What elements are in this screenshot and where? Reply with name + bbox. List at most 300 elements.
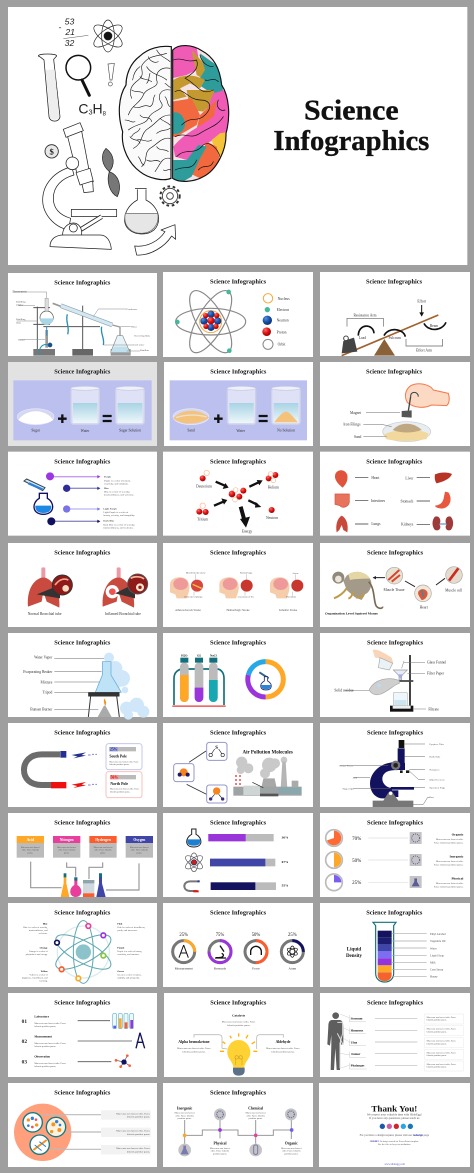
slide title: Science Infographics [54,550,111,557]
heading: Science Infographics [273,95,429,157]
icon: test tube sketch [38,54,60,121]
slide: test tube rack and donut [163,633,313,717]
labels: magnet diagram: Iron Filings [343,422,361,426]
text boxes [101,1110,151,1154]
connectors [194,1035,283,1049]
labels: Sugar [31,428,41,432]
text boxes: Maecenas non laoreet odio. Fusce [427,1041,456,1043]
text boxes: Maecenas non laoreet odio. Fusce [116,1112,151,1115]
labels and arrows: organs: Lungs [371,522,381,526]
labels: Helium [268,486,279,490]
labels: bones [340,1014,417,1069]
slide: catalysts bulb [164,993,313,1077]
slide: nuclear fusion [163,452,313,536]
diagram: filtration: Solid residue [334,689,354,693]
heading: Science Infographics: Infographics [273,126,429,157]
text: licence [370,1140,419,1146]
diagram: atom teal [51,921,115,983]
rows: lab steps: 01 [22,1019,27,1025]
text blocks: Blue is a color of serenity, [104,491,130,494]
slide: atom colours [8,903,157,987]
diagram: organ circles: Muscle Tissue [383,588,405,592]
labels: Objective Lens [429,779,444,782]
operators [58,414,112,423]
diagram: distillation: Thermometer [12,291,27,294]
icon: monkey [332,572,383,608]
chart: timeline [178,1108,297,1156]
text blocks: Light Purple is a color of [103,511,128,514]
icon: subtraction sum: 21 [64,27,75,37]
diagram: lever: Load [359,336,366,340]
labels [31,428,141,433]
chart: donut [248,662,283,697]
labels: bones: Humerus [351,1028,364,1032]
text: timeline top: odio. Fusce lobortis [246,1114,265,1117]
diagram: distillation: Distilling [16,301,26,304]
labels [175,571,299,612]
icon: gear [160,186,180,206]
rows: lab steps: Maecenas non laoreet odio. Fusce [34,1022,66,1025]
labels: Coarse Focus [339,765,353,768]
labels: density: Corn Syrup [430,968,444,972]
slide: bronchial tubes [8,543,157,627]
text: alpha bromoketone: Maecenas non laoreet odio. Fusce [177,1047,212,1050]
text: timeline bottom: Organic [285,1142,298,1146]
icon: subtraction sum: 32 [65,38,74,48]
slide title: Science Infographics [367,1000,424,1007]
labels: density: Vegetable Oil [430,939,446,943]
text: atom right notes: Green is a color of nature, [117,974,142,977]
formula: C3H8: 3 [88,108,93,117]
slide title: Science Infographics [210,910,267,917]
slide: microscope [320,723,470,807]
text blocks: Light Purple [103,507,118,510]
diagram: filtration: Filter Paper [427,672,445,676]
text boxes: Maecenas non laoreet odio. Fusce [116,1130,151,1133]
text: atom right notes: Pink is a color of friendliness, [117,926,146,929]
rows: lab steps: lobortis porttitor purus. [34,1045,56,1048]
icon: beaker with sand [272,386,300,424]
labels [187,428,295,433]
chart: ring force [245,933,267,971]
slide title: Science Infographics [54,459,111,466]
icons: social [380,1124,413,1129]
slide: petri dishes [8,1083,157,1167]
labels: No Solution [277,428,295,432]
diagram: filtration [334,650,446,712]
text: timeline top: Inorganic [177,1106,193,1110]
text boxes: Maecenas non laoreet odio. Fusce [427,1017,456,1019]
cards: elements: Oxygen [133,838,145,842]
icon: flask [187,829,201,847]
text: alpha bromoketone [177,1040,212,1053]
icon: hand with magnet [402,384,449,418]
text blocks: trustworthiness, and welcome. [104,494,135,497]
slide title: Science Infographics [366,459,423,466]
chart: pie 25: 25% [352,881,361,886]
slide: numbered steps [8,993,157,1077]
labels and arrows: organs: Intestines [371,499,386,503]
legend: Neutron [277,319,289,323]
text: design request: For you have a design request, please visit our redesign page [360,1133,430,1137]
slide: filtration [320,633,470,717]
text: timeline bottom: Physical [213,1142,227,1146]
slide: sand no solution [164,362,313,446]
icon: round flask [125,188,159,234]
labels: Thrombus [286,595,296,598]
chart: ring force: 50% [252,933,260,938]
text: atom right notes: stability, and prosperity. [117,977,140,980]
labels: Hemorrhagic Stroke [226,608,250,612]
diagram: navy microscope [370,740,414,807]
labels: bones: Ulna [351,1040,358,1044]
text: timeline top: odio. Fusce lobortis [175,1114,194,1117]
bar: third [211,882,289,890]
icon: human silhouette [327,1012,343,1070]
icon: test tubes [113,1013,134,1029]
text blocks: trustworthiness, and welcome. [103,526,134,529]
diagram: lever: Resistance Arm [353,314,377,318]
slide: squirrel monkey [320,543,470,627]
labels and arrows: organs: Kidneys [401,523,414,527]
icon: inflamed lungs [103,567,148,608]
labels: Aneurysm of the [237,595,255,598]
text boxes: lobortis porttitor purus. [427,1031,447,1033]
text: alpha bromoketone: Alpha bromoketone [178,1040,210,1044]
card: north pole: Maecenas non laoreet odio. Fusce [110,789,139,791]
heading: liquid density: Liquid [347,947,361,952]
panel: hero cover [8,7,467,265]
text: catalysts: lobortis porttitor purus. [227,1024,251,1027]
labels and arrows: organs: Stomach [401,500,413,504]
text: catalysts: Catalysts [232,1013,246,1017]
labels: Water [236,429,246,433]
labels: Base [429,796,435,799]
text: timeline top: Chemical [248,1106,263,1110]
text: atom left notes: Yellow is a color of [29,974,48,977]
slide: chemistry timeline [163,1083,313,1167]
illustration: brain coloured hemisphere [172,45,230,182]
chart: ring measurement [173,933,195,971]
connectors [31,862,139,890]
text: alpha bromoketone: lobortis porttitor purus. [182,1050,206,1053]
band: slide rows 4 to 6 [8,543,470,807]
card: south pole: lobortis porttitor purus. [109,764,130,766]
icon: head three [270,577,303,598]
labels: Evaporating Beaker [23,670,53,674]
slide title: Science Infographics [210,820,267,827]
labels: Water [81,429,90,433]
text: atom left notes: Blue [43,922,49,925]
cards: elements: Maecenas non laoreet [57,847,76,849]
rows: organic, inorganic, physical: Fusce lobortis porttitor purus. [434,885,464,888]
slide: evaporation [8,633,157,720]
chart: pie 25 [326,874,361,891]
icon: intestines [335,494,349,507]
rows: organic, inorganic, physical: Fusce lobortis porttitor purus. [434,863,464,866]
icon: coin [45,145,58,158]
icon: petri dishes [14,1104,71,1161]
icon: subtraction sum: - [59,22,62,32]
text blocks: Purple [104,476,112,479]
slide title: Science Infographics [54,640,111,647]
diagram: filtration: Glass Funnel [427,661,446,665]
heading: liquid density [346,947,363,959]
cards: elements: odio. Fusce lobortis [22,850,39,852]
icon: atom [184,853,204,872]
text: licence: Use the files to keep for attribution. [378,1143,411,1146]
card: north pole: 56% [111,776,118,780]
text boxes: lobortis porttitor purus. [127,1116,150,1119]
labels and arrows: organs: Heart [371,476,379,480]
slide title: Science Infographics [54,1090,111,1097]
card: north pole [106,772,142,798]
labels and arrows: organs: Liver [405,477,414,481]
rows: organic, inorganic, physical [368,832,464,888]
arrows: reaction [214,482,259,520]
icon: normal lungs [28,567,72,608]
operators [214,414,268,423]
text: atom left notes: Blue is a color of serenity, [23,926,48,929]
diagram: distillation: Receiving flask [134,334,151,337]
icon: test tube rack: H2O [181,653,188,657]
diagram: distillation: Water [131,326,137,329]
rows: organic, inorganic, physical: Maecenas non laoreet odio. [436,838,464,841]
text: timeline top: porttitor purus. [249,1117,263,1120]
heading: thank you: Thank You! [371,1104,417,1113]
chart: density tube [373,922,396,982]
icon: donut flask [259,672,271,690]
diagram: lever: Effort [417,300,426,304]
labels: Aneur [292,572,299,575]
slide: distillation apparatus [8,273,157,356]
slide title: Science Infographics [210,459,267,466]
diagram: lever: Beam [430,324,438,328]
labels: Tritium [197,518,208,522]
cards: elements: Hydrogen [95,838,111,842]
icon: sand dish [173,409,209,425]
slide: liquid density [320,903,470,987]
text: aldehyde: Maecenas non laoreet odio. Fusce [266,1047,301,1050]
text blocks: creativity, and nobalism. [104,483,129,486]
legend: Proton [277,330,287,334]
text boxes: Maecenas non laoreet odio. Fusce [116,1147,151,1150]
slide title: Science Infographics [54,910,111,917]
slide title: Science Infographics [210,279,267,286]
diagram: fusion spheres [196,470,278,515]
labels: Ischemic Stroke [279,608,298,612]
arrows [78,1021,132,1062]
rows: organic, inorganic, physical: Maecenas non laoreet odio. [436,860,464,863]
icon: curved arrow [135,225,176,255]
text boxes: Maecenas non laoreet odio. Fusce [427,1029,456,1031]
diagram: molecule boxes [174,742,227,803]
text blocks: Dark Blue is a color of serenity, [103,523,135,526]
band: slide rows 9 and 10 [8,993,470,1167]
icon: lungs [336,516,348,532]
text: atom left notes: Yellow [41,970,48,973]
text blocks: Purple is a color of luxury, [104,480,131,483]
labels: Mixture [41,680,53,684]
diagram: organ circles: Heart [420,605,428,609]
icon: microscope sketch [43,123,117,249]
labels: Sand [187,428,195,432]
diagram: distillation: Distilling [16,318,26,321]
diagram: distillation: Burner [18,339,25,342]
icon: flask pouring [24,479,53,514]
text boxes: Maecenas non laoreet odio. Fusce [427,1052,456,1054]
link: website: www.slideegg.com [384,1163,406,1166]
icon: coin: $ [50,147,55,157]
text: aldehyde [266,1040,301,1053]
icon: head one [170,577,203,598]
rows: organic, inorganic, physical: Physical [451,877,463,881]
labels: density: Water [430,946,437,950]
slide: skeleton [320,993,470,1077]
icon: magnet [184,880,200,892]
text: atom right notes: Purple is a color of luxury, [117,950,143,953]
rows: organic, inorganic, physical: Maecenas non laoreet odio. [436,882,464,885]
text blocks: beauty, serenity, and tranquility. [103,514,135,517]
text: atom right notes: youth, and innocence. [117,929,138,932]
text: atom left notes: trustworthiness, and [29,929,48,932]
text: timeline bottom: porttitor purus. [284,1152,299,1155]
cards: elements: purus. [28,852,33,854]
text: atom left notes: Orange is a color of [29,950,48,953]
arrowheads [221,480,263,528]
labels: bones: Phalanges [351,1063,365,1067]
icon: flask and burner [88,662,121,717]
labels and arrows: organs [355,476,430,527]
text blocks: Dark Blue [103,520,115,523]
diagram: lever: Fulcrum [388,336,401,340]
diagram: atom [175,285,246,359]
labels: Eyepiece Tube [429,743,445,746]
diagram: distillation: adapter [16,304,23,307]
slide: organs [320,452,470,536]
chart: ring measurement: 25% [179,933,188,938]
slide: thank you [319,1083,470,1167]
formula: C3H8: 8 [103,111,107,117]
text: atom right notes: Purple [117,946,125,949]
icon: liver [435,473,452,483]
icon: test tube rack: NaCl [210,653,217,657]
text boxes: lobortis porttitor purus. [427,1043,447,1045]
icon: head two [219,577,253,598]
diagram: distillation: Cool water [133,343,144,346]
text: atom right notes: Pink [117,922,123,925]
slide title: Science Infographics [54,820,111,827]
text: atom left notes: Orange [40,946,49,949]
chart: ring atom: 25% [288,933,297,938]
text boxes: lobortis porttitor purus. [427,1055,447,1057]
rows: lab steps: Maecenas non laoreet odio. Fusce [34,1042,66,1045]
diagram: organ circles [373,567,462,609]
connectors [42,1115,101,1149]
rows: lab steps: 03 [22,1060,27,1066]
icon: molecule [115,1054,131,1068]
labels: Atherosclerosis Stroke [175,608,202,612]
labels: magnet diagram [343,411,400,439]
cards: elements: Maecenas non laoreet [21,847,40,849]
panel: lilac equation [13,380,152,440]
slide title: Science Infographics [54,730,111,737]
labels: Blood blocks artery [186,571,206,574]
text: timeline bottom: Maecenas non laoreet [281,1147,302,1150]
text: atom left notes: happiness, friendliness, and [22,977,49,980]
slide title: Science Infographics [367,640,424,647]
labels: density: Liquid Soap [430,953,444,957]
labels: density [392,932,446,979]
slide title: Science Infographics [54,1000,111,1007]
diagram: organ circles: Muscle cell [445,588,462,592]
text: timeline top: porttitor purus. [178,1117,192,1120]
icon: heart [335,470,348,488]
bar: second [210,859,289,866]
icon: kidneys [432,516,453,530]
icon: force lightning [72,752,97,788]
icon: test tube rack [172,653,226,707]
text: thanks message: If you have any questions, please reach us [369,1116,420,1121]
slide: pies [320,813,470,897]
text boxes: lobortis porttitor purus. [127,1133,150,1136]
text: timeline bottom: odio. Fusce lobortis [211,1150,229,1153]
icon: sand dish [383,422,431,442]
labels: bones: Femur [351,1052,361,1056]
labels [196,484,279,533]
labels: magnet diagram: Magnet [350,411,361,415]
text boxes: lobortis porttitor purus. [427,1067,447,1069]
labels: Tripod [43,690,52,694]
chart: pie 50 [326,852,361,868]
icon: exclamation mark [108,63,114,86]
icon: beaker solution [116,386,144,424]
card: south pole: South Pole [109,755,127,759]
bar: second: 67% [282,860,289,864]
slide title: Science Infographics [54,280,111,287]
diagram: distillation [12,291,151,356]
icon: atom sketch [91,20,125,52]
bar: third: 55% [282,883,289,887]
cards: elements: odio. Fusce lobortis [131,850,148,852]
text: timeline bottom: Maecenas non laoreet [210,1147,230,1150]
labels: Cholesterol plaque [184,595,204,598]
slide: magnet poles [8,723,157,807]
band: slide rows 1 to 3 [8,272,470,536]
text boxes: lobortis porttitor purus. [127,1150,150,1153]
text: atom right notes: Green [117,970,125,973]
text boxes: lobortis porttitor purus. [427,1020,447,1022]
slide title: Science Infographics [210,550,267,557]
labels: Sugar Solution [119,428,141,432]
text blocks: Blue [104,487,110,490]
labels: Bunsen Burner [30,708,53,712]
labels: Energy [242,529,252,533]
band: slide rows 7 and 8 [8,813,470,987]
text: licence: CREDIT: Desktop created for PowerPoint template. [370,1140,419,1143]
slide: lever [320,272,470,356]
icon: test tube rack: O2 [197,653,201,657]
chart: pie 70: 70% [352,837,361,842]
slide title: Science Infographics [367,730,424,737]
icon: magnifying glass [66,55,91,95]
text boxes: Maecenas non laoreet odio. Fusce [427,1064,456,1066]
diagram: molecule boxes: S [215,746,218,751]
slide title: Science Infographics [210,640,267,647]
cards: elements: purus. [64,852,70,854]
slide title: Science Infographics [367,820,424,827]
rows: lab steps: lobortis porttitor purus. [34,1025,56,1028]
